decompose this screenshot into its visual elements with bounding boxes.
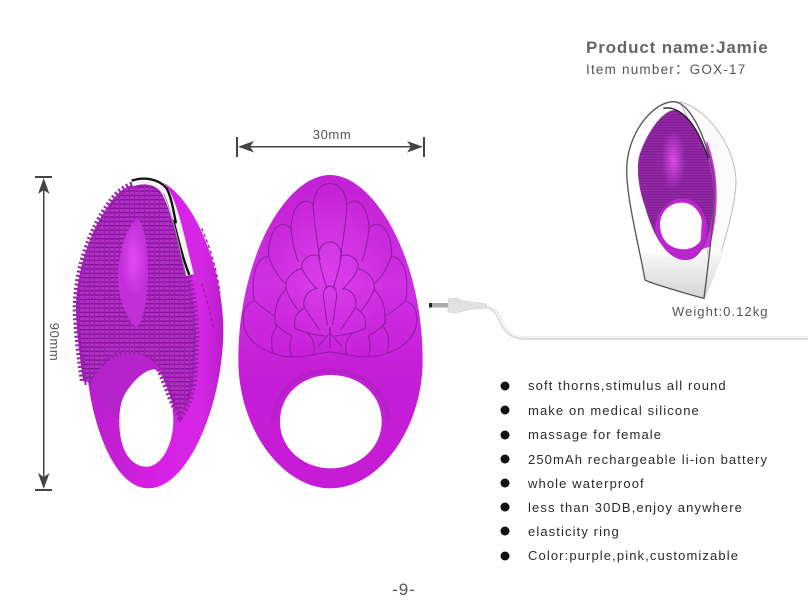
side marking xyxy=(202,228,220,330)
width dimension: 30mm: 30mm xyxy=(313,127,351,142)
feature: colour: Color:purple,pink,customizable xyxy=(528,548,739,563)
feature list xyxy=(500,378,768,563)
feature: massage: massage for female xyxy=(528,427,662,442)
feature: noise: less than 30DB,enjoy anywhere xyxy=(528,500,743,515)
feature: silicone: make on medical silicone xyxy=(528,403,700,418)
base xyxy=(642,250,725,298)
thorn field xyxy=(76,183,196,417)
product: front view with scale pattern xyxy=(238,175,423,488)
oval hollow xyxy=(118,218,148,327)
device in purple xyxy=(638,110,714,260)
egg body xyxy=(238,175,423,488)
item number: Item number：GOX-17 xyxy=(586,62,746,77)
ring rim shade xyxy=(273,371,388,422)
lower ring xyxy=(655,198,707,260)
lit centre xyxy=(661,130,685,190)
title: product name: Product name:Jamie xyxy=(586,38,769,57)
device side xyxy=(700,140,717,250)
product: side view with thorns xyxy=(76,178,223,488)
product in packaging xyxy=(627,102,736,298)
page number: -9- xyxy=(392,580,416,599)
feature: ring: elasticity ring xyxy=(528,524,620,539)
height dimension: 90mm: 90mm xyxy=(47,323,62,361)
chrome strip xyxy=(132,179,190,275)
scale pattern xyxy=(243,183,417,357)
charging cable xyxy=(429,298,808,338)
height dimension: 90mm xyxy=(35,176,62,491)
ring shoulder shade xyxy=(92,354,160,420)
ring body xyxy=(84,178,223,488)
weight: Weight:0.12kg xyxy=(672,304,769,319)
width dimension: 30mm xyxy=(236,127,425,157)
upper glow xyxy=(273,187,387,353)
feature: thorns: soft thorns,stimulus all round xyxy=(528,378,727,393)
feature: battery: 250mAh rechargeable li-ion battery xyxy=(528,452,768,467)
back shell xyxy=(680,102,736,298)
case outline xyxy=(627,102,714,298)
top chrome line xyxy=(663,108,708,158)
feature: waterproof: whole waterproof xyxy=(527,476,645,491)
